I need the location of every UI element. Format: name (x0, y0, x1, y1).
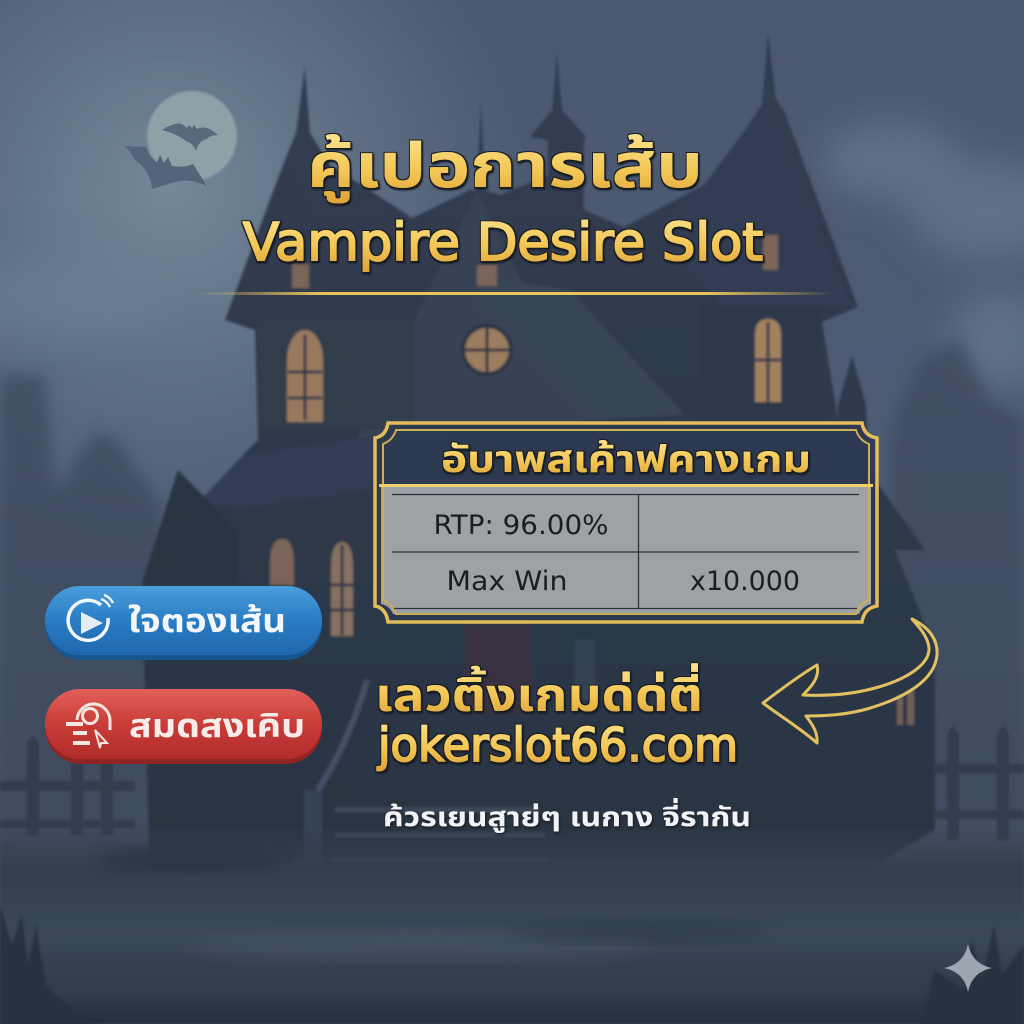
fences (0, 725, 1024, 840)
blue button (45, 586, 322, 660)
windows (270, 235, 914, 725)
call to action Thai: เลวติ้งเกมด่ด่ตี่ (375, 663, 703, 721)
tagline: ค้วรเยนสูาย่ๆ เนกาง จี่รากัน (383, 798, 751, 833)
table cell: x10.000: x10.000 (690, 566, 800, 597)
icon: play (68, 595, 113, 640)
icon: sparkle (944, 944, 992, 992)
title line: Thai: คู้เปอการเส้บ (307, 132, 703, 204)
haunted house (142, 32, 935, 880)
title divider (195, 292, 835, 295)
table cell: RTP: RTP: 96.00% (434, 510, 608, 541)
title (243, 132, 763, 273)
info table panel (375, 423, 877, 622)
table cell: Max Win: Max Win (446, 566, 568, 597)
button label: สมดสงเคิบ (129, 707, 305, 744)
panel heading: อับาพสเค้าฟคางเกม (441, 439, 811, 480)
arrow (763, 619, 937, 743)
distant scenery (0, 340, 1024, 855)
porch stairs (304, 640, 595, 880)
foreground ground (0, 825, 1024, 1024)
house silhouette (142, 32, 935, 880)
title line: English: Vampire Desire Slot (243, 213, 763, 273)
icon: badge cursor (66, 704, 110, 748)
button label: ใจตองเส้น (128, 602, 286, 639)
website url: jokerslot66.com (377, 718, 738, 772)
moon with bats (124, 91, 237, 189)
gable and roof faces (142, 105, 850, 583)
red button (45, 689, 322, 764)
doorway (465, 625, 531, 715)
